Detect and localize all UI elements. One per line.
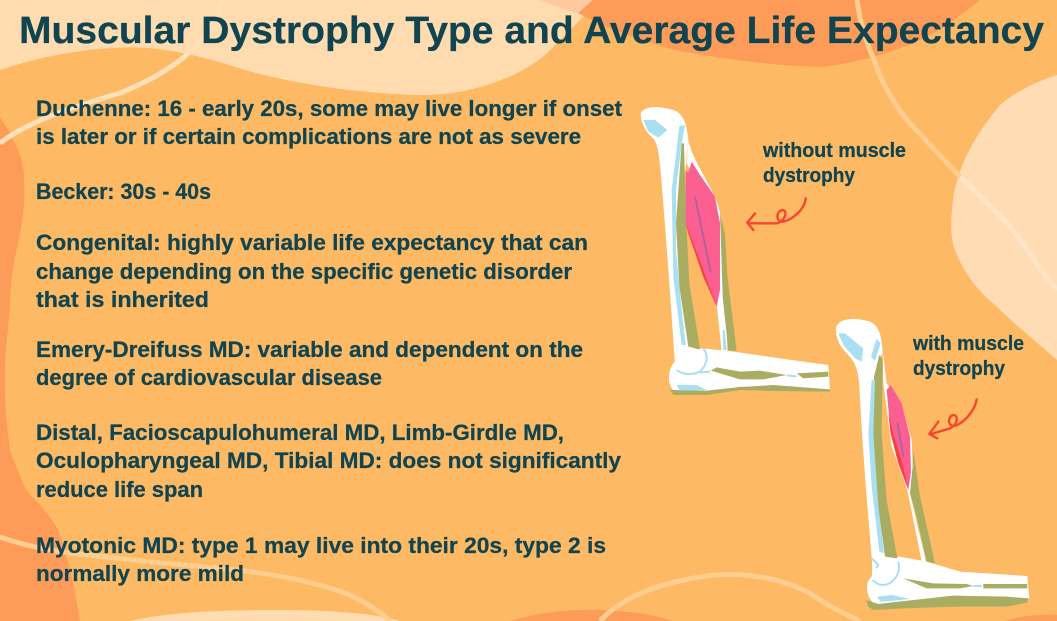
text block: Emery-Dreifuss <box>36 337 583 390</box>
text block: Duchenne: is later or if certain complications are not as severe <box>36 124 581 149</box>
text block: Emery-Dreifuss: degree of cardiovascular disease <box>36 365 382 390</box>
arrow: pointing to healthy muscle <box>747 198 806 230</box>
label: without muscle dystrophy <box>762 140 906 187</box>
text block: Myotonic: normally more mild <box>36 561 244 586</box>
text block: Congenital <box>36 230 588 312</box>
text block: Distal and others <box>36 420 622 502</box>
text block: Becker: Becker: 30s - 40s <box>36 179 211 204</box>
text block: Emery-Dreifuss: Emery-Dreifuss MD: variable and dependent on the <box>36 337 583 362</box>
arrow: pointing to wasted muscle <box>929 399 977 438</box>
label: without muscle dystrophy: without muscle <box>762 140 906 162</box>
text block: Distal and others: reduce life span <box>36 477 203 502</box>
text block: Duchenne: Duchenne: 16 - early 20s, some may live longer if onset <box>36 96 623 121</box>
illustration: arm with muscular dystrophy <box>836 319 1029 610</box>
text block: Myotonic: Myotonic MD: type 1 may live into their 20s, type 2 is <box>36 533 606 558</box>
label: with muscle dystrophy: dystrophy <box>913 358 1006 380</box>
title: Muscular Dystrophy Type and Average Life Expectancy <box>19 10 1044 52</box>
text block: Congenital: change depending on the specific genetic disorder <box>36 259 572 284</box>
illustration: healthy arm <box>641 107 830 395</box>
label: with muscle dystrophy: with muscle <box>912 333 1024 355</box>
label: with muscle dystrophy <box>912 333 1024 380</box>
text block: Congenital: that is inherited <box>36 287 209 312</box>
text block: Congenital: Congenital: highly variable life expectancy that can <box>36 230 588 255</box>
label: without muscle dystrophy: dystrophy <box>763 165 856 187</box>
text block: Myotonic <box>36 533 606 586</box>
text block: Distal and others: Oculopharyngeal MD, Tibial MD: does not significantly <box>36 448 622 473</box>
text block: Distal and others: Distal, Facioscapulohumeral MD, Limb-Girdle MD, <box>36 420 564 445</box>
text block: Duchenne <box>36 96 623 149</box>
